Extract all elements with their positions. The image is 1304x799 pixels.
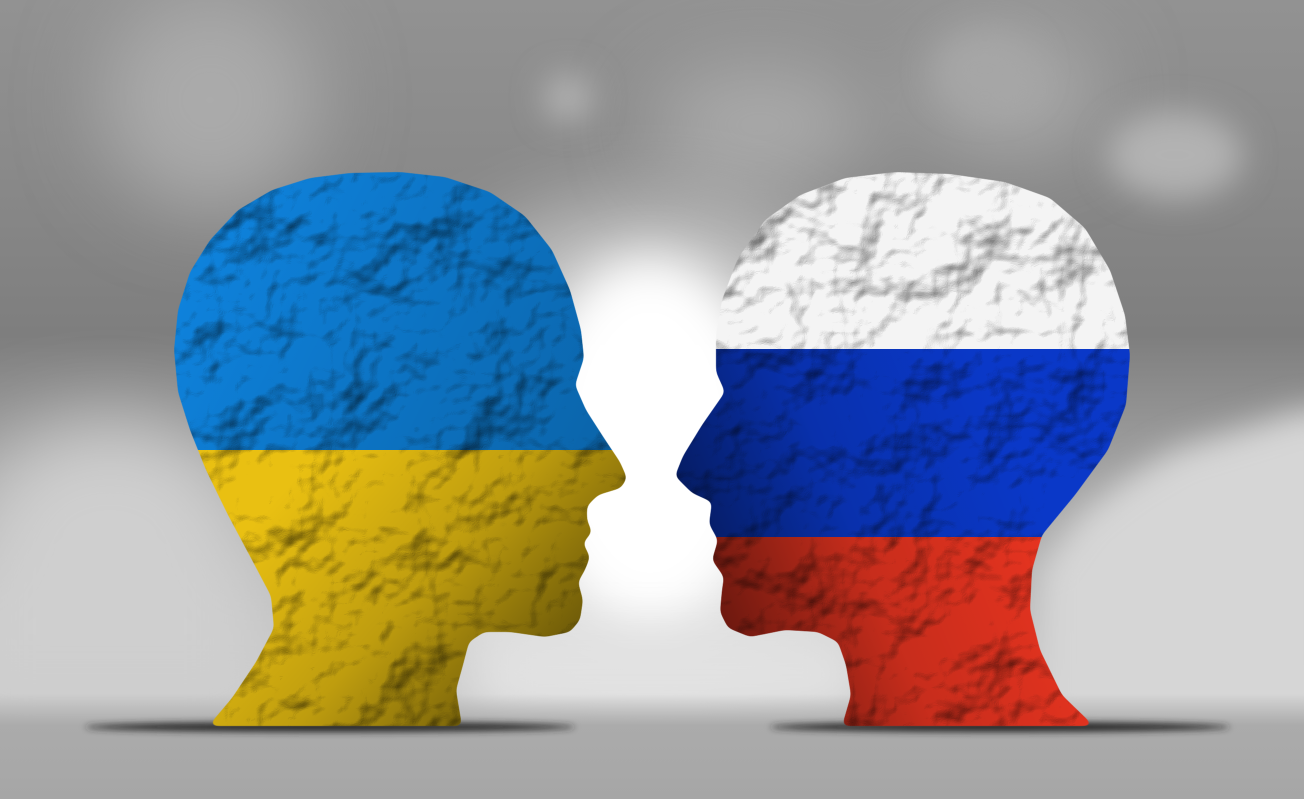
yellow band: [198, 450, 626, 726]
ground shadow: left head: [85, 722, 575, 732]
red band: [713, 537, 1089, 726]
central white glow: [360, 200, 940, 720]
ground shadow: right head: [770, 722, 1230, 732]
head: Ukraine flag, blue over yellow: [160, 160, 640, 740]
head: Russia flag, white, blue and red: [660, 160, 1140, 739]
floor: [0, 694, 1304, 799]
white band: [716, 172, 1130, 349]
blue band: [660, 349, 1140, 537]
blue band: [174, 172, 612, 450]
